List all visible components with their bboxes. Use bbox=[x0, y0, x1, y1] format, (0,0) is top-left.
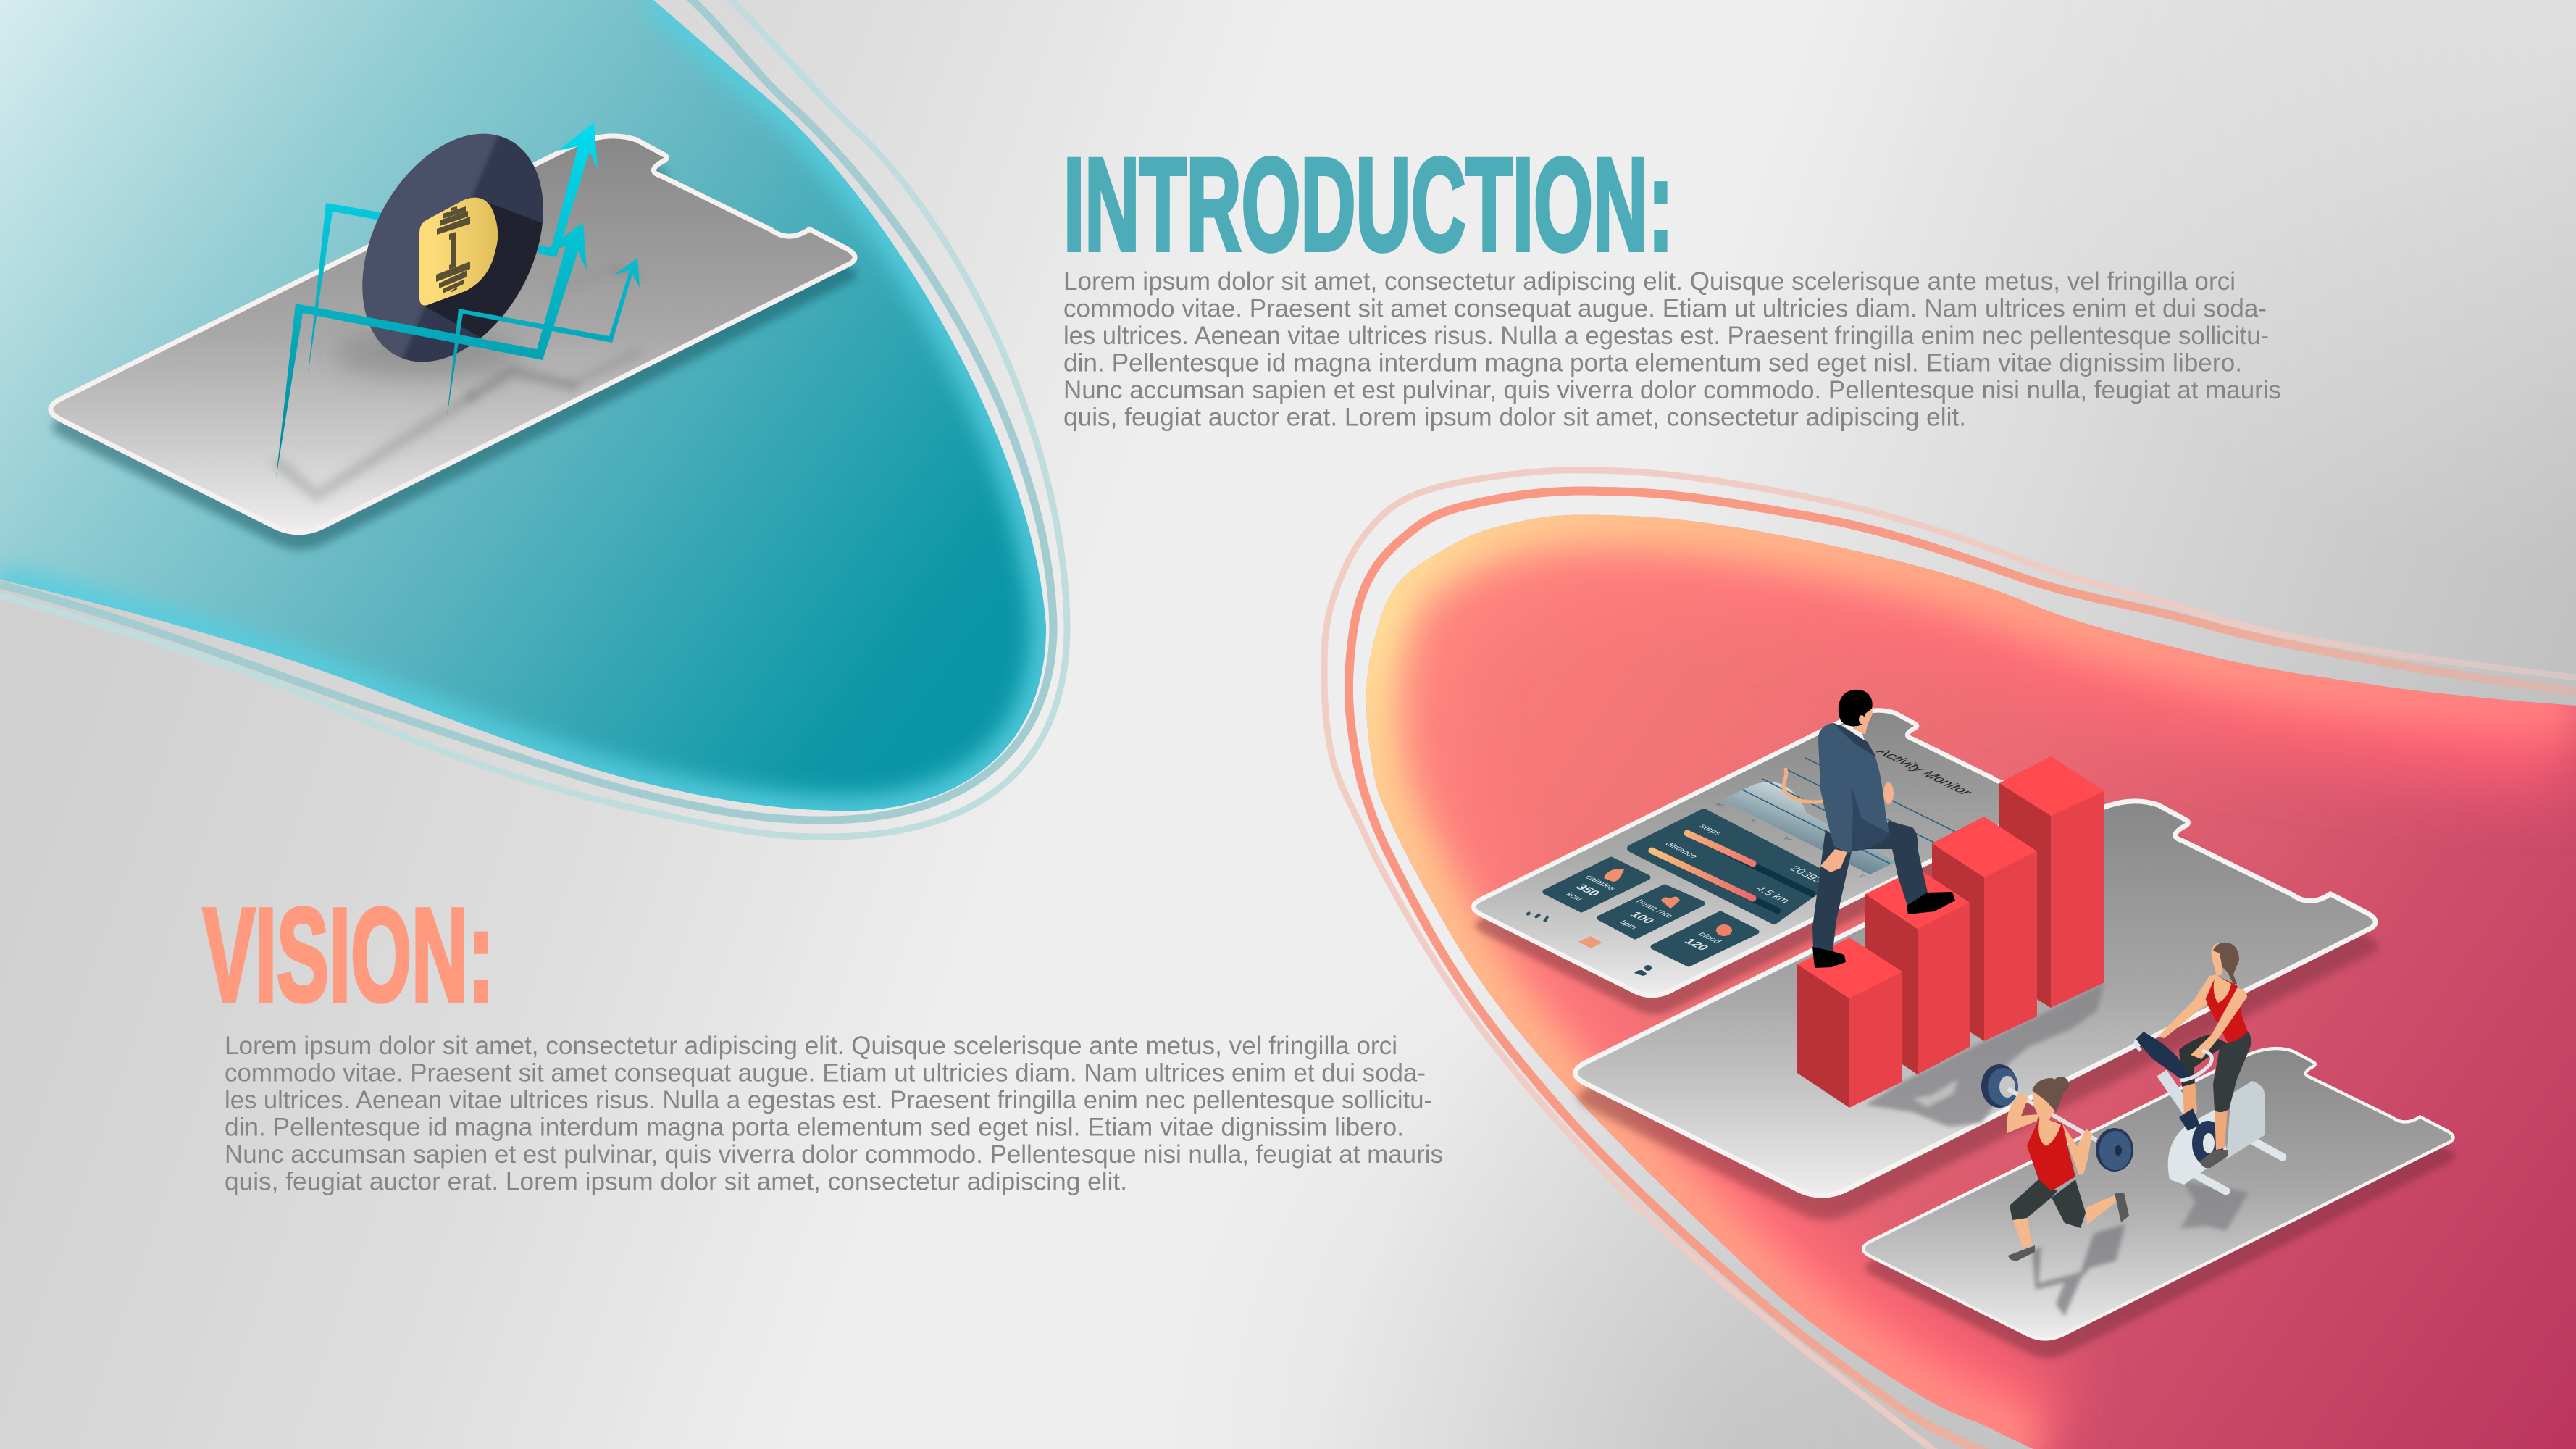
card: calories: 350 bbox=[1573, 882, 1603, 898]
phone floor shadows bbox=[279, 270, 637, 496]
exercise bike bbox=[2162, 1073, 2283, 1191]
torso bbox=[2205, 975, 2248, 1043]
card: steps and distance: distance bbox=[1663, 840, 1701, 859]
far leg bbox=[2183, 1081, 2197, 1117]
icon: yellow dumbbell badge bbox=[419, 198, 498, 306]
icon: dark disc bbox=[362, 133, 543, 362]
card: calories bbox=[1545, 859, 1648, 910]
panel: coral blob bbox=[1324, 470, 2576, 1449]
title: activity monitor: Activity Monitor bbox=[1873, 746, 1975, 798]
figure: woman on exercise bike bbox=[2136, 943, 2283, 1191]
head bbox=[2032, 1090, 2056, 1123]
text block: introduction body: les ultrices. Aenean vitae ultrices risus. Nulla a egestas est. Praesent fringilla enim nec pellentesque sollicitu- bbox=[1063, 322, 2269, 350]
chart: activity area bbox=[1714, 758, 1955, 879]
card: calories: kcal bbox=[1564, 892, 1584, 902]
chart: activity area: W bbox=[1781, 836, 1794, 842]
torso bbox=[2027, 1117, 2075, 1191]
barbell bbox=[1981, 1064, 2133, 1172]
front leg bbox=[2012, 1216, 2032, 1248]
text block: vision body: din. Pellentesque id magna interdum magna porta elementum sed eget nisl. Etiam vitae dignissim libero. bbox=[225, 1113, 1404, 1142]
chart: activity area: T bbox=[1747, 819, 1757, 824]
card: steps and distance bbox=[1631, 812, 1833, 921]
chart: activity area: F bbox=[1857, 874, 1868, 879]
arrow: back growth arrow bbox=[308, 122, 598, 375]
arrow: front growth arrows bbox=[276, 222, 640, 478]
bar chart: isometric red bars bbox=[1797, 756, 2104, 1108]
text block: vision body: commodo vitae. Praesent sit amet consequat augue. Etiam ut ultricies diam. Nam ultrices enim et dui soda- bbox=[225, 1059, 1426, 1087]
panel: activity monitor phone bbox=[1473, 710, 2054, 1014]
card: blood: 120 bbox=[1681, 937, 1712, 952]
card: blood bbox=[1653, 914, 1757, 964]
panel: bars phone bbox=[1576, 801, 2378, 1220]
text block: introduction body: din. Pellentesque id magna interdum magna porta elementum sed eget nisl. Etiam vitae dignissim libero. bbox=[1063, 349, 2242, 377]
card: heart rate bbox=[1599, 887, 1702, 937]
text block: introduction body: quis, feugiat auctor erat. Lorem ipsum dolor sit amet, consectetur adipiscing elit. bbox=[1063, 403, 1966, 432]
heading: vision: VISION: bbox=[203, 880, 494, 1029]
panel: teal phone with dumbbell icon bbox=[51, 116, 856, 550]
card: steps and distance: 4,5 km bbox=[1752, 885, 1793, 905]
woman cast shadow bbox=[2032, 1224, 2125, 1316]
text block: vision body bbox=[225, 1032, 1443, 1195]
head bbox=[2211, 943, 2222, 976]
near leg bbox=[2215, 1109, 2228, 1150]
text block: introduction body: Lorem ipsum dolor sit amet, consectetur adipiscing elit. Quisque scelerisque ante metus, vel fringilla orci bbox=[1063, 267, 2236, 296]
text block: introduction body: Nunc accumsan sapien et est pulvinar, quis viverra dolor commodo. Pellentesque nisi nulla, feugiat at mauris bbox=[1063, 376, 2281, 404]
neckline bbox=[2214, 974, 2231, 1003]
text block: vision body: Lorem ipsum dolor sit amet, consectetur adipiscing elit. Quisque scelerisque ante metus, vel fringilla orci bbox=[225, 1032, 1397, 1060]
bars cast shadow bbox=[1865, 982, 2104, 1127]
shadow light gap bbox=[1912, 1080, 1958, 1107]
icon: nav bars bbox=[1526, 911, 1549, 922]
console bbox=[2136, 1032, 2192, 1079]
text block: vision body: Nunc accumsan sapien et est pulvinar, quis viverra dolor commodo. Pellentesque nisi nulla, feugiat at mauris bbox=[225, 1140, 1443, 1169]
card: heart rate: 100 bbox=[1627, 910, 1657, 925]
text block: vision body: les ultrices. Aenean vitae ultrices risus. Nulla a egestas est. Praesent fringilla enim nec pellentesque sollicitu- bbox=[225, 1086, 1432, 1114]
text block: introduction body: commodo vitae. Praesent sit amet consequat augue. Etiam ut ultricies diam. Nam ultrices enim et dui soda- bbox=[1063, 294, 2267, 323]
panel: fitness phone bbox=[1863, 1048, 2456, 1358]
card: blood: blood bbox=[1696, 931, 1724, 945]
chart: activity area: M bbox=[1714, 802, 1726, 808]
figure: businessman climbing bars bbox=[1812, 690, 1955, 968]
panel: teal blob bbox=[0, 0, 1067, 837]
figure: woman lifting barbell bbox=[1981, 1064, 2133, 1261]
card: calories: calories bbox=[1583, 874, 1618, 891]
neckline bbox=[2038, 1116, 2061, 1146]
arms bbox=[2158, 974, 2217, 1038]
clamp bbox=[2179, 1108, 2200, 1131]
card: steps and distance: steps bbox=[1697, 823, 1725, 837]
card: heart rate: bpm bbox=[1618, 919, 1639, 930]
back leg bbox=[2086, 1195, 2117, 1224]
card: steps and distance: 20393 bbox=[1786, 864, 1826, 885]
heading: introduction: INTRODUCTION: bbox=[1063, 130, 1673, 278]
text block: introduction body bbox=[1063, 267, 2281, 432]
text block: vision body: quis, feugiat auctor erat. Lorem ipsum dolor sit amet, consectetur adipiscing elit. bbox=[225, 1168, 1127, 1195]
card: heart rate: heart rate bbox=[1634, 898, 1676, 919]
arms bbox=[2007, 1093, 2038, 1133]
bike cast shadow bbox=[2180, 1182, 2249, 1231]
icon: nav person bbox=[1634, 965, 1652, 976]
icon: nav monitor bbox=[1578, 936, 1602, 948]
